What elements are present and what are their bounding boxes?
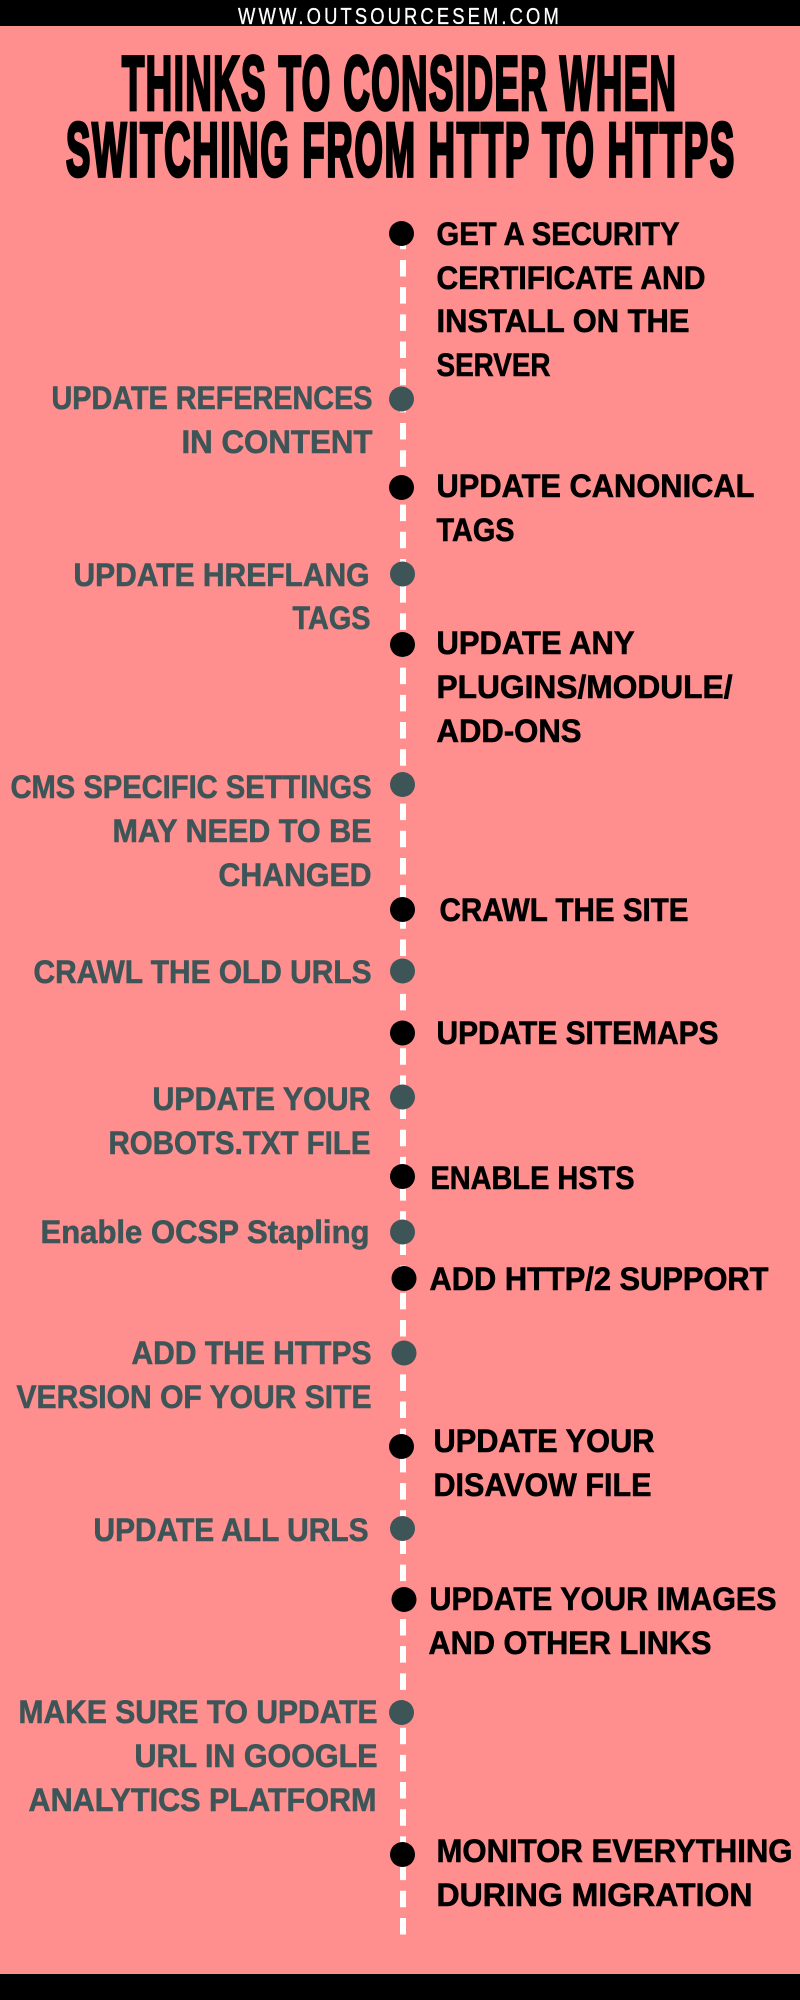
banner url: WWW.OUTSOURCESEM.COM	[238, 4, 559, 30]
step: update disavow file	[389, 1423, 654, 1503]
step: update robots.txt: UPDATE YOUR	[152, 1081, 370, 1117]
step: cms specific settings	[10, 769, 415, 893]
step: add http/2 support: ADD HTTP/2 SUPPORT	[430, 1261, 769, 1297]
step: update images and links: UPDATE YOUR IMAGES	[430, 1581, 776, 1617]
step: update references in content: IN CONTENT	[182, 424, 373, 460]
step: cms specific settings: MAY NEED TO BE	[112, 813, 372, 849]
step: update disavow file: UPDATE YOUR	[434, 1423, 654, 1459]
title	[66, 41, 734, 193]
step: get a security certificate: SERVER	[436, 347, 550, 383]
step: add the https version: ADD THE HTTPS	[132, 1335, 372, 1371]
top banner	[0, 0, 800, 30]
step: update url in google analytics: ANALYTICS PLATFORM	[28, 1782, 376, 1818]
step: update canonical tags	[389, 468, 754, 548]
step: update images and links	[392, 1581, 776, 1661]
step: cms specific settings: CMS SPECIFIC SETTINGS	[10, 769, 372, 805]
step: update url in google analytics: MAKE SURE TO UPDATE	[18, 1694, 378, 1730]
step: update robots.txt: ROBOTS.TXT FILE	[108, 1125, 370, 1161]
step: update plugins	[390, 625, 733, 749]
step: update plugins: PLUGINS/MODULE/	[436, 669, 733, 705]
step: monitor everything	[390, 1833, 792, 1913]
step: update hreflang tags: UPDATE HREFLANG	[74, 557, 370, 593]
step: get a security certificate: INSTALL ON THE	[436, 303, 690, 339]
step: enable ocsp stapling: Enable OCSP Stapling	[40, 1214, 370, 1250]
step: update hreflang tags: TAGS	[292, 600, 370, 636]
step: get a security certificate: CERTIFICATE AND	[436, 260, 706, 296]
step: update references in content: UPDATE REFERENCES	[52, 380, 372, 416]
step: update sitemaps: UPDATE SITEMAPS	[436, 1015, 718, 1051]
step: update canonical tags: TAGS	[436, 512, 514, 548]
bottom bar	[0, 1974, 800, 2000]
title: SWITCHING FROM HTTP TO HTTPS	[66, 107, 734, 193]
step: crawl the site: CRAWL THE SITE	[440, 892, 688, 928]
step: monitor everything: DURING MIGRATION	[436, 1877, 752, 1913]
step: add the https version	[16, 1335, 416, 1415]
step: update references in content	[52, 380, 414, 460]
step: update hreflang tags	[74, 557, 415, 636]
step: crawl the old urls: CRAWL THE OLD URLS	[34, 954, 372, 990]
step: add the https version: VERSION OF YOUR SITE	[16, 1379, 372, 1415]
step: update images and links: AND OTHER LINKS	[428, 1625, 712, 1661]
step: update canonical tags: UPDATE CANONICAL	[436, 468, 754, 504]
step: update url in google analytics: URL IN GOOGLE	[134, 1738, 378, 1774]
step: update plugins: UPDATE ANY	[436, 625, 634, 661]
step: cms specific settings: CHANGED	[218, 857, 372, 893]
step: get a security certificate	[389, 216, 706, 383]
step: get a security certificate: GET A SECURITY	[436, 216, 680, 252]
step: monitor everything: MONITOR EVERYTHING	[436, 1833, 792, 1869]
title: THINKS TO CONSIDER WHEN	[122, 41, 676, 126]
step: update url in google analytics	[18, 1694, 414, 1818]
step: update all urls: UPDATE ALL URLS	[94, 1512, 368, 1548]
step: update plugins: ADD-ONS	[436, 713, 582, 749]
step: update robots.txt	[108, 1081, 415, 1161]
timeline dashed line	[400, 233, 406, 1935]
step: update disavow file: DISAVOW FILE	[434, 1467, 652, 1503]
step: enable hsts: ENABLE HSTS	[430, 1160, 634, 1196]
